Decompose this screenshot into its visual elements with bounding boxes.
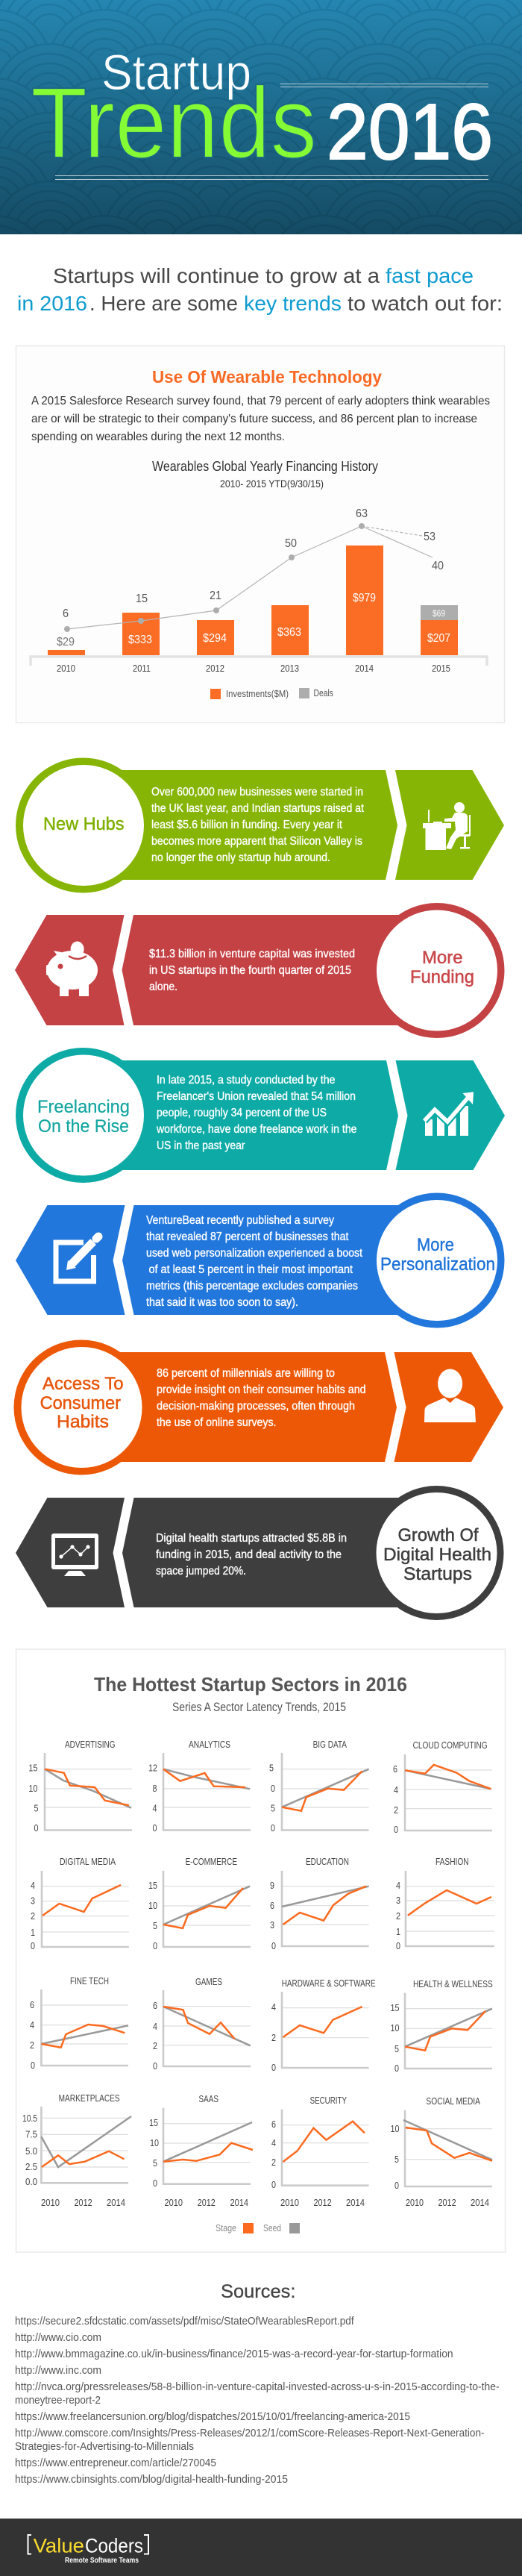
sources list: http://www.comscore.com/Insights/Press-Releases/2012/1/comScore-Releases-Report-Next-Generation- bbox=[15, 2427, 485, 2439]
bar chart: investments and deals: 15 bbox=[136, 593, 148, 605]
sources list: https://www.cbinsights.com/blog/digital-health-funding-2015 bbox=[15, 2473, 288, 2486]
text: consumer habits: the use of online surveys. bbox=[157, 1416, 276, 1429]
circle: freelancing: Freelancing bbox=[37, 1097, 130, 1117]
text: personalization: of at least 5 percent in their most important bbox=[149, 1263, 353, 1276]
intro text: to watch out for: bbox=[348, 292, 503, 315]
chart: education: 6 bbox=[270, 1900, 274, 1911]
x-axis year labels: 2014 bbox=[346, 2197, 365, 2208]
text: freelancing: In late 2015, a study conducted by the bbox=[157, 1074, 336, 1087]
circle: digital health: Startups bbox=[403, 1564, 472, 1584]
circle: more funding: Funding bbox=[410, 967, 474, 987]
chart: big data: 0 bbox=[271, 1822, 275, 1833]
bar chart: investments and deals: 2014 bbox=[355, 663, 374, 674]
text: digital health bbox=[156, 1532, 347, 1578]
chart: analytics: 4 bbox=[152, 1803, 157, 1813]
icon: piggy bank bbox=[46, 942, 98, 996]
chart: education: 3 bbox=[270, 1919, 274, 1931]
text: more funding: in US startups in the fourth quarter of 2015 bbox=[149, 964, 351, 977]
text: personalization bbox=[146, 1214, 363, 1309]
arrow tip: personalization bbox=[16, 1205, 125, 1315]
sources list: http://www.cio.com bbox=[15, 2331, 101, 2344]
circle: freelancing bbox=[16, 1048, 151, 1183]
text: consumer habits: decision-making processes, often through bbox=[157, 1400, 355, 1413]
circle: consumer habits: Access To bbox=[43, 1374, 124, 1394]
chart subtitle: 2010- 2015 YTD(9/30/15) bbox=[220, 478, 324, 490]
chart: cloud computing: 4 bbox=[394, 1784, 398, 1795]
subheading: latency trends: Series A Sector Latency Trends, 2015 bbox=[172, 1701, 346, 1714]
chart: hardware and software bbox=[271, 1978, 376, 2073]
chart: marketplaces: MARKETPLACES bbox=[59, 2092, 120, 2104]
circle: new hubs bbox=[16, 758, 151, 892]
chart: marketplaces bbox=[22, 2092, 131, 2187]
circle: digital health: Growth Of bbox=[398, 1525, 479, 1545]
sources list: http://www.bmmagazine.co.uk/in-business/finance/2015-was-a-record-year-for-startup-formation bbox=[15, 2348, 453, 2360]
icon: growth chart bbox=[424, 1092, 474, 1136]
chart: security: 2 bbox=[271, 2157, 276, 2168]
heading: use of wearable technology: Use Of Wearable Technology bbox=[152, 367, 382, 387]
panel: more personalization bbox=[16, 1192, 504, 1328]
chart: security: 0 bbox=[271, 2179, 276, 2190]
bar chart: investments and deals: $29 bbox=[57, 636, 75, 648]
x-axis year labels: 2012 bbox=[313, 2197, 332, 2208]
chart: e-commerce: 15 bbox=[148, 1880, 157, 1891]
circle: more funding: More bbox=[422, 948, 462, 968]
chart: social media bbox=[391, 2095, 492, 2191]
chart: fine tech bbox=[30, 1975, 128, 2071]
chart: hardware and software: HARDWARE & SOFTWARE bbox=[282, 1978, 376, 1989]
chart: saas: 10 bbox=[150, 2137, 159, 2148]
panel: hottest startup sectors bbox=[16, 1649, 506, 2252]
sources list: moneytree-report-2 bbox=[15, 2394, 101, 2407]
chart: security: 4 bbox=[271, 2137, 276, 2148]
arrow tip: freelancing bbox=[395, 1060, 505, 1170]
chart: digital media: 2 bbox=[31, 1910, 35, 1922]
circle: personalization: Personalization bbox=[380, 1254, 495, 1275]
chart: advertising: 10 bbox=[28, 1783, 37, 1794]
chart: hardware and software: 2 bbox=[271, 2032, 276, 2043]
text: freelancing: US in the past year bbox=[157, 1139, 245, 1152]
arrow tip: digital health bbox=[16, 1498, 125, 1607]
chart: health and wellness: 15 bbox=[391, 2002, 400, 2013]
bar chart: investments and deals: $69 bbox=[433, 608, 445, 619]
x-axis year labels: 2012 bbox=[75, 2197, 92, 2208]
text: personalization: metrics (this percentage excludes companies bbox=[146, 1280, 358, 1292]
chart: e-commerce bbox=[148, 1856, 251, 1951]
text: more funding bbox=[149, 948, 355, 993]
chart: cloud computing: 6 bbox=[393, 1763, 397, 1775]
chart: security: SECURITY bbox=[310, 2095, 347, 2106]
circle: more funding bbox=[370, 903, 504, 1038]
legend: stage and seed: Seed bbox=[263, 2222, 281, 2233]
bar chart: investments and deals: $333 bbox=[128, 634, 152, 646]
text: new hubs: Over 600,000 new businesses were started in bbox=[151, 786, 363, 798]
chart: health and wellness bbox=[391, 1978, 493, 2074]
chart: fashion: 1 bbox=[396, 1926, 400, 1937]
bar chart: investments and deals: 63 bbox=[356, 507, 368, 520]
text: consumer habits: 86 percent of millennials are willing to bbox=[157, 1367, 335, 1380]
chart: games: GAMES bbox=[195, 1976, 222, 1987]
panel: new hubs bbox=[16, 758, 504, 892]
text: new hubs: becomes more apparent that Silicon Valley is bbox=[151, 835, 362, 848]
chart: saas bbox=[149, 2093, 253, 2189]
bar chart: investments and deals: 40 bbox=[432, 560, 444, 572]
legend: stage and seed bbox=[216, 2222, 300, 2233]
chart: marketplaces: 10.5 bbox=[22, 2113, 37, 2124]
chart: analytics: ANALYTICS bbox=[189, 1739, 230, 1750]
text: digital health: Digital health startups attracted $5.8B in bbox=[156, 1532, 347, 1545]
chart: e-commerce: 5 bbox=[153, 1920, 157, 1931]
chart legend: Deals bbox=[313, 687, 333, 698]
chart: advertising: 0 bbox=[34, 1822, 39, 1833]
chart: education: EDUCATION bbox=[306, 1856, 349, 1867]
text: new hubs: no longer the only startup hub around. bbox=[151, 851, 330, 864]
chart: games: 0 bbox=[153, 2060, 157, 2072]
chart: fine tech: 2 bbox=[30, 2039, 34, 2051]
chart: games: 4 bbox=[153, 2021, 157, 2032]
chart: games bbox=[153, 1976, 251, 2072]
chart: big data: 5 bbox=[269, 1763, 274, 1773]
icon: pencil and square bbox=[56, 1237, 98, 1281]
chart: digital media: 0 bbox=[31, 1940, 35, 1951]
chart: saas: 15 bbox=[149, 2117, 158, 2128]
sources list: http://www.inc.com bbox=[15, 2364, 101, 2377]
sources list: https://secure2.sfdcstatic.com/assets/pdf/misc/StateOfWearablesReport.pdf bbox=[15, 2315, 354, 2328]
chart: hardware and software: 0 bbox=[271, 2062, 276, 2073]
x-axis year labels: 2010 bbox=[406, 2197, 424, 2208]
chart: fine tech: 0 bbox=[31, 2060, 35, 2071]
text: digital health: funding in 2015, and deal activity to the bbox=[156, 1548, 342, 1561]
chart: fashion: 3 bbox=[396, 1895, 400, 1906]
icon: person at desk bbox=[423, 802, 471, 850]
bar chart: investments and deals: 2015 bbox=[432, 663, 450, 674]
text: personalization: VentureBeat recently published a survey bbox=[146, 1214, 334, 1227]
chart title: Wearables Global Yearly Financing History bbox=[152, 459, 378, 474]
title: 2016: 2016 bbox=[327, 88, 493, 176]
paragraph: wearables survey: spending on wearables during the next 12 months. bbox=[31, 431, 285, 443]
chart: fashion: 0 bbox=[396, 1940, 400, 1951]
chart: advertising bbox=[28, 1739, 132, 1833]
icon: person bbox=[424, 1369, 476, 1422]
chart: cloud computing: 2 bbox=[394, 1804, 398, 1816]
panel: more funding bbox=[15, 903, 504, 1038]
chart: games: 2 bbox=[153, 2040, 157, 2051]
chart: analytics: 0 bbox=[152, 1822, 157, 1833]
text: personalization: that revealed 87 percent of businesses that bbox=[146, 1231, 349, 1243]
paragraph: wearables survey: A 2015 Salesforce Research survey found, that 79 percent of early adopters think wearables bbox=[31, 395, 490, 407]
text: more funding: alone. bbox=[149, 981, 177, 993]
chart: cloud computing: CLOUD COMPUTING bbox=[413, 1739, 488, 1751]
intro text: key trends bbox=[244, 292, 342, 315]
text: consumer habits bbox=[157, 1367, 366, 1429]
bar chart: investments and deals: 53 bbox=[424, 531, 435, 543]
circle: new hubs: New Hubs bbox=[43, 814, 124, 834]
intro text bbox=[17, 264, 503, 315]
chart: social media: 10 bbox=[391, 2123, 400, 2134]
bar chart: investments and deals: $294 bbox=[203, 632, 227, 645]
paragraph: wearables survey: are or will be strategic to their company's future success, and 86 percent plan to increase bbox=[31, 413, 477, 425]
text: consumer habits: provide insight on their consumer habits and bbox=[157, 1384, 366, 1396]
text: new hubs bbox=[151, 786, 365, 864]
panel: access to consumer habits bbox=[13, 1340, 503, 1475]
paragraph: wearables survey bbox=[31, 395, 490, 443]
bar chart: investments and deals bbox=[31, 507, 487, 674]
circle: consumer habits: Consumer bbox=[40, 1393, 121, 1413]
circle: personalization: More bbox=[417, 1235, 454, 1255]
bar chart: investments and deals: 2013 bbox=[280, 663, 299, 674]
chart: security: 6 bbox=[271, 2119, 276, 2130]
chart: marketplaces: 2.5 bbox=[25, 2161, 37, 2172]
chart: e-commerce: 0 bbox=[153, 1940, 157, 1951]
circle: freelancing: On the Rise bbox=[38, 1116, 129, 1137]
arrow tip: new hubs bbox=[395, 770, 504, 880]
x-axis year labels: 2012 bbox=[198, 2197, 216, 2208]
title: Trends: Trends bbox=[31, 66, 317, 179]
intro text: Startups will continue to grow at a bbox=[53, 264, 380, 287]
chart: analytics: 8 bbox=[152, 1783, 157, 1794]
chart: saas: SAAS bbox=[198, 2093, 218, 2104]
chart: health and wellness: 10 bbox=[391, 2022, 400, 2033]
panel: freelancing on the rise bbox=[16, 1048, 505, 1183]
chart legend bbox=[210, 687, 333, 699]
bar chart: investments and deals: 50 bbox=[285, 537, 297, 550]
chart: fine tech: 6 bbox=[30, 1999, 34, 2010]
chart: social media: 5 bbox=[394, 2154, 399, 2165]
bar chart: investments and deals: $207 bbox=[427, 632, 450, 645]
chart: digital media: 4 bbox=[31, 1880, 35, 1891]
chart: big data bbox=[269, 1739, 369, 1833]
chart: social media: 0 bbox=[394, 2180, 399, 2191]
text: freelancing: Freelancer's Union revealed that 54 million bbox=[157, 1090, 356, 1103]
intro text: in 2016 bbox=[17, 292, 87, 315]
chart: big data: 0 bbox=[271, 1783, 275, 1794]
bar chart: investments and deals: 2011 bbox=[133, 663, 151, 674]
chart: hardware and software: 4 bbox=[271, 2001, 276, 2013]
chart: digital media bbox=[31, 1856, 129, 1951]
chart: fine tech: 4 bbox=[30, 2019, 34, 2031]
chart: saas: 5 bbox=[153, 2157, 157, 2169]
x-axis year labels: 2010 bbox=[164, 2197, 183, 2208]
chart: marketplaces: 5.0 bbox=[25, 2145, 37, 2157]
logo: ValueCoders bbox=[28, 2535, 148, 2565]
chart: digital media: 1 bbox=[31, 1927, 35, 1938]
x-axis year labels bbox=[41, 2197, 489, 2208]
x-axis year labels: 2014 bbox=[471, 2197, 489, 2208]
x-axis year labels: 2012 bbox=[438, 2197, 456, 2208]
title: Startup: Startup bbox=[101, 45, 251, 101]
chart: health and wellness: HEALTH & WELLNESS bbox=[413, 1978, 493, 1989]
bar chart: investments and deals: 2010 bbox=[57, 663, 75, 674]
heading: hottest startup sectors: The Hottest Startup Sectors in 2016 bbox=[94, 1673, 407, 1695]
circle: digital health: Digital Health bbox=[383, 1545, 491, 1565]
chart legend: Investments($M) bbox=[226, 688, 289, 699]
chart: fashion: 2 bbox=[396, 1910, 400, 1922]
chart: cloud computing: 0 bbox=[394, 1824, 398, 1835]
sources list: Strategies-for-Advertising-to-Millennials bbox=[15, 2440, 194, 2453]
text: personalization: used web personalization experienced a boost bbox=[146, 1247, 363, 1260]
chart: advertising: 5 bbox=[34, 1803, 39, 1813]
text: freelancing: workforce, have done freelance work in the bbox=[156, 1123, 356, 1136]
chart: social media: SOCIAL MEDIA bbox=[426, 2095, 480, 2107]
chart: marketplaces: 0.0 bbox=[25, 2176, 37, 2187]
bar chart: investments and deals: 2012 bbox=[206, 663, 224, 674]
chart: fashion: 4 bbox=[396, 1880, 400, 1891]
heading: sources: Sources: bbox=[221, 2281, 295, 2302]
chart: e-commerce: E-COMMERCE bbox=[186, 1856, 237, 1867]
text: new hubs: the UK last year, and Indian startups raised at bbox=[151, 802, 365, 815]
logo: ValueCoders: Value bbox=[34, 2535, 84, 2557]
footer bbox=[0, 2519, 522, 2576]
logo: ValueCoders: Coders bbox=[85, 2535, 143, 2557]
text: freelancing bbox=[156, 1074, 356, 1152]
chart: education bbox=[270, 1856, 369, 1951]
panel: wearable technology bbox=[16, 346, 504, 722]
x-axis year labels: 2014 bbox=[107, 2197, 125, 2208]
sources list bbox=[15, 2315, 500, 2486]
chart: advertising: 15 bbox=[28, 1763, 37, 1773]
panel: growth of digital health startups bbox=[16, 1486, 504, 1620]
chart: digital media: 3 bbox=[31, 1895, 35, 1906]
logo: ValueCoders: Remote Software Teams bbox=[65, 2556, 139, 2565]
bar chart: investments and deals: $979 bbox=[353, 592, 376, 604]
chart: analytics: 12 bbox=[148, 1763, 157, 1773]
chart: advertising: ADVERTISING bbox=[65, 1739, 115, 1750]
chart: e-commerce: 10 bbox=[148, 1900, 157, 1911]
header banner bbox=[0, 0, 522, 234]
sources list: https://www.entrepreneur.com/article/270045 bbox=[15, 2457, 216, 2469]
intro text: . Here are some bbox=[89, 292, 238, 315]
text: new hubs: least $5.6 billion in funding. Every year it bbox=[151, 819, 343, 831]
bar chart: investments and deals: $363 bbox=[277, 626, 301, 639]
sources list: http://nvca.org/pressreleases/58-8-billion-in-venture-capital-invested-across-u-s-in-2015-according-to-the- bbox=[15, 2380, 500, 2393]
chart: big data: BIG DATA bbox=[313, 1739, 347, 1750]
chart: saas: 0 bbox=[153, 2178, 157, 2189]
chart: security bbox=[271, 2095, 369, 2190]
legend: stage and seed: Stage bbox=[216, 2222, 236, 2233]
circle: personalization bbox=[370, 1192, 504, 1328]
circle: consumer habits: Habits bbox=[57, 1412, 109, 1432]
chart: marketplaces: 7.5 bbox=[25, 2128, 37, 2140]
chart: analytics bbox=[148, 1739, 251, 1833]
chart: big data: 5 bbox=[271, 1803, 275, 1813]
icon: monitor with chart bbox=[51, 1534, 98, 1576]
sources list: https://www.freelancersunion.org/blog/dispatches/2015/10/01/freelancing-america-2015 bbox=[15, 2410, 410, 2423]
chart: fashion bbox=[396, 1856, 494, 1951]
x-axis year labels: 2014 bbox=[230, 2197, 248, 2208]
chart: digital media: DIGITAL MEDIA bbox=[60, 1856, 116, 1867]
chart: fine tech: FINE TECH bbox=[70, 1975, 109, 1986]
bar chart: investments and deals: 21 bbox=[210, 590, 221, 602]
intro text: fast pace bbox=[386, 264, 474, 287]
arrow tip: consumer habits bbox=[394, 1352, 503, 1462]
chart: games: 6 bbox=[153, 2000, 157, 2011]
chart: health and wellness: 0 bbox=[394, 2063, 399, 2074]
text: personalization: that said it was too soon to say). bbox=[146, 1296, 298, 1309]
circle: digital health bbox=[370, 1486, 504, 1620]
circle: consumer habits bbox=[13, 1340, 149, 1475]
x-axis year labels: 2010 bbox=[41, 2197, 60, 2208]
text: freelancing: people, roughly 34 percent of the US bbox=[157, 1107, 327, 1119]
chart: health and wellness: 5 bbox=[394, 2043, 399, 2054]
text: digital health: space jumped 20%. bbox=[156, 1565, 246, 1578]
x-axis year labels: 2010 bbox=[280, 2197, 299, 2208]
chart: education: 0 bbox=[271, 1940, 276, 1951]
chart: cloud computing bbox=[393, 1739, 492, 1835]
arrow tip: more funding bbox=[15, 915, 124, 1025]
chart: fashion: FASHION bbox=[435, 1856, 469, 1867]
text: more funding: $11.3 billion in venture capital was invested bbox=[149, 948, 355, 960]
chart: education: 9 bbox=[270, 1880, 274, 1891]
bar chart: investments and deals: 6 bbox=[63, 607, 69, 620]
